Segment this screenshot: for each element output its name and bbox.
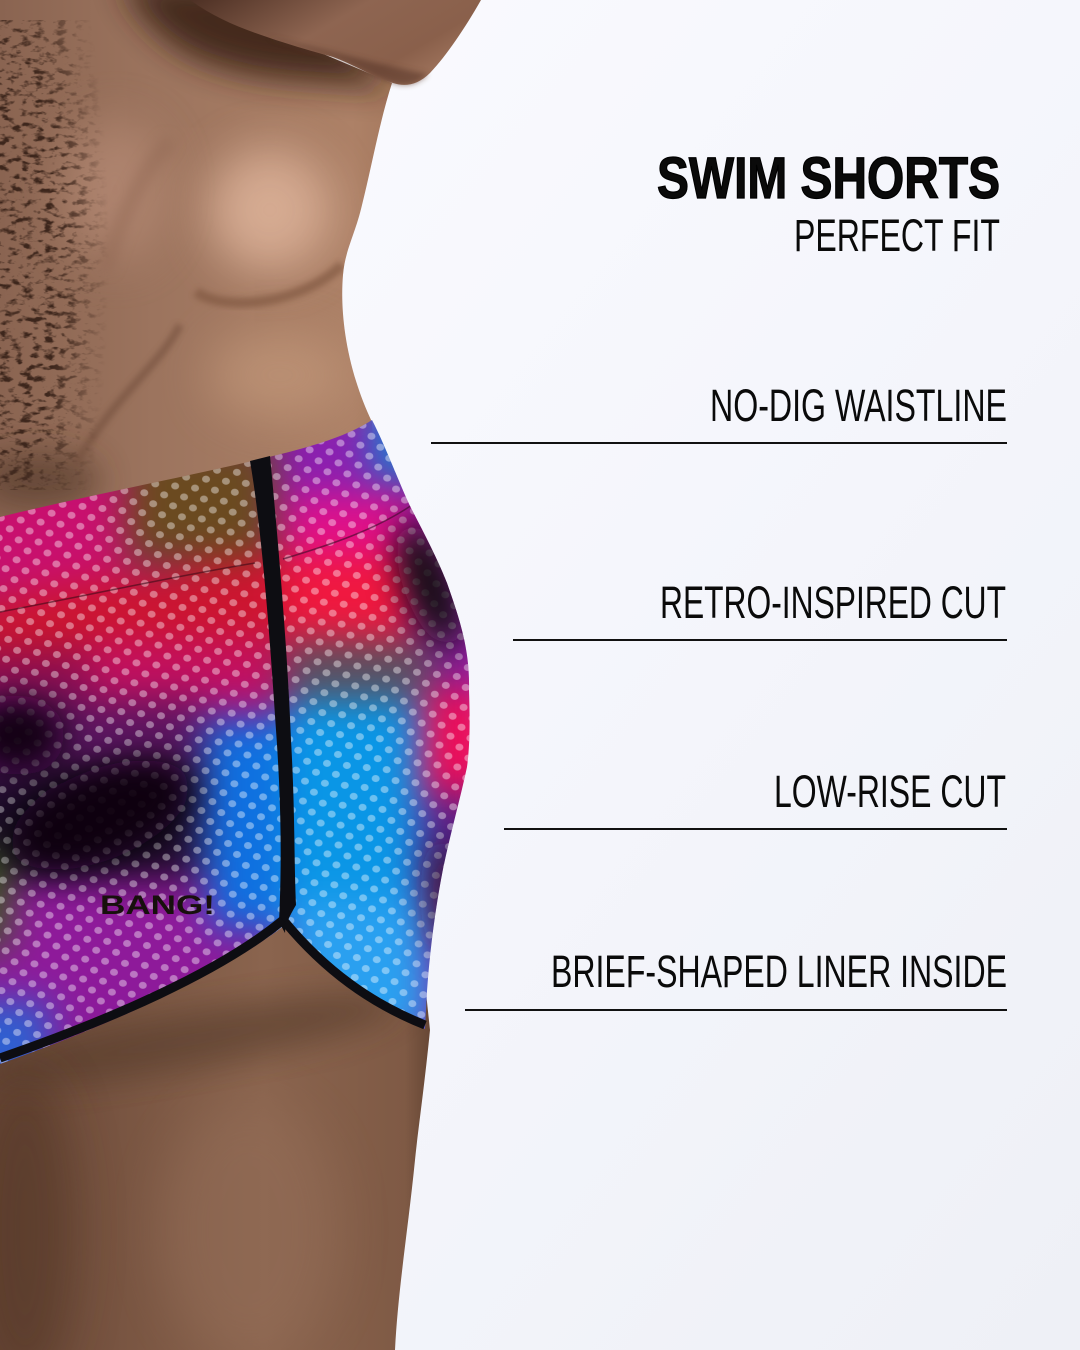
swim shorts — [0, 420, 470, 1064]
torso and leg skin — [0, 0, 440, 1350]
heading: swim shorts: SWIM SHORTS — [657, 146, 1000, 211]
chest highlight — [208, 148, 332, 272]
waistband seams — [0, 563, 255, 612]
photo: model body — [0, 0, 481, 1350]
print colour field — [0, 420, 470, 1064]
leg shading — [14, 985, 390, 1088]
right hem binding — [285, 922, 425, 1025]
subheading: perfect fit: PERFECT FIT — [794, 210, 1000, 261]
forearm lower shadow — [267, 37, 428, 85]
title — [657, 146, 1000, 261]
shadow under the arm — [120, 0, 390, 90]
forearm — [190, 0, 481, 85]
side panel bands — [285, 410, 390, 495]
brand logo: BANG! — [100, 890, 215, 920]
front panel bands — [0, 470, 130, 590]
black side piping — [250, 456, 296, 933]
chest hair texture — [0, 20, 115, 490]
dark folds over the print — [0, 515, 477, 950]
dot pattern — [0, 400, 480, 1080]
muscle creases — [196, 265, 342, 303]
left hem binding — [0, 920, 283, 1058]
lower left shade — [0, 452, 100, 508]
